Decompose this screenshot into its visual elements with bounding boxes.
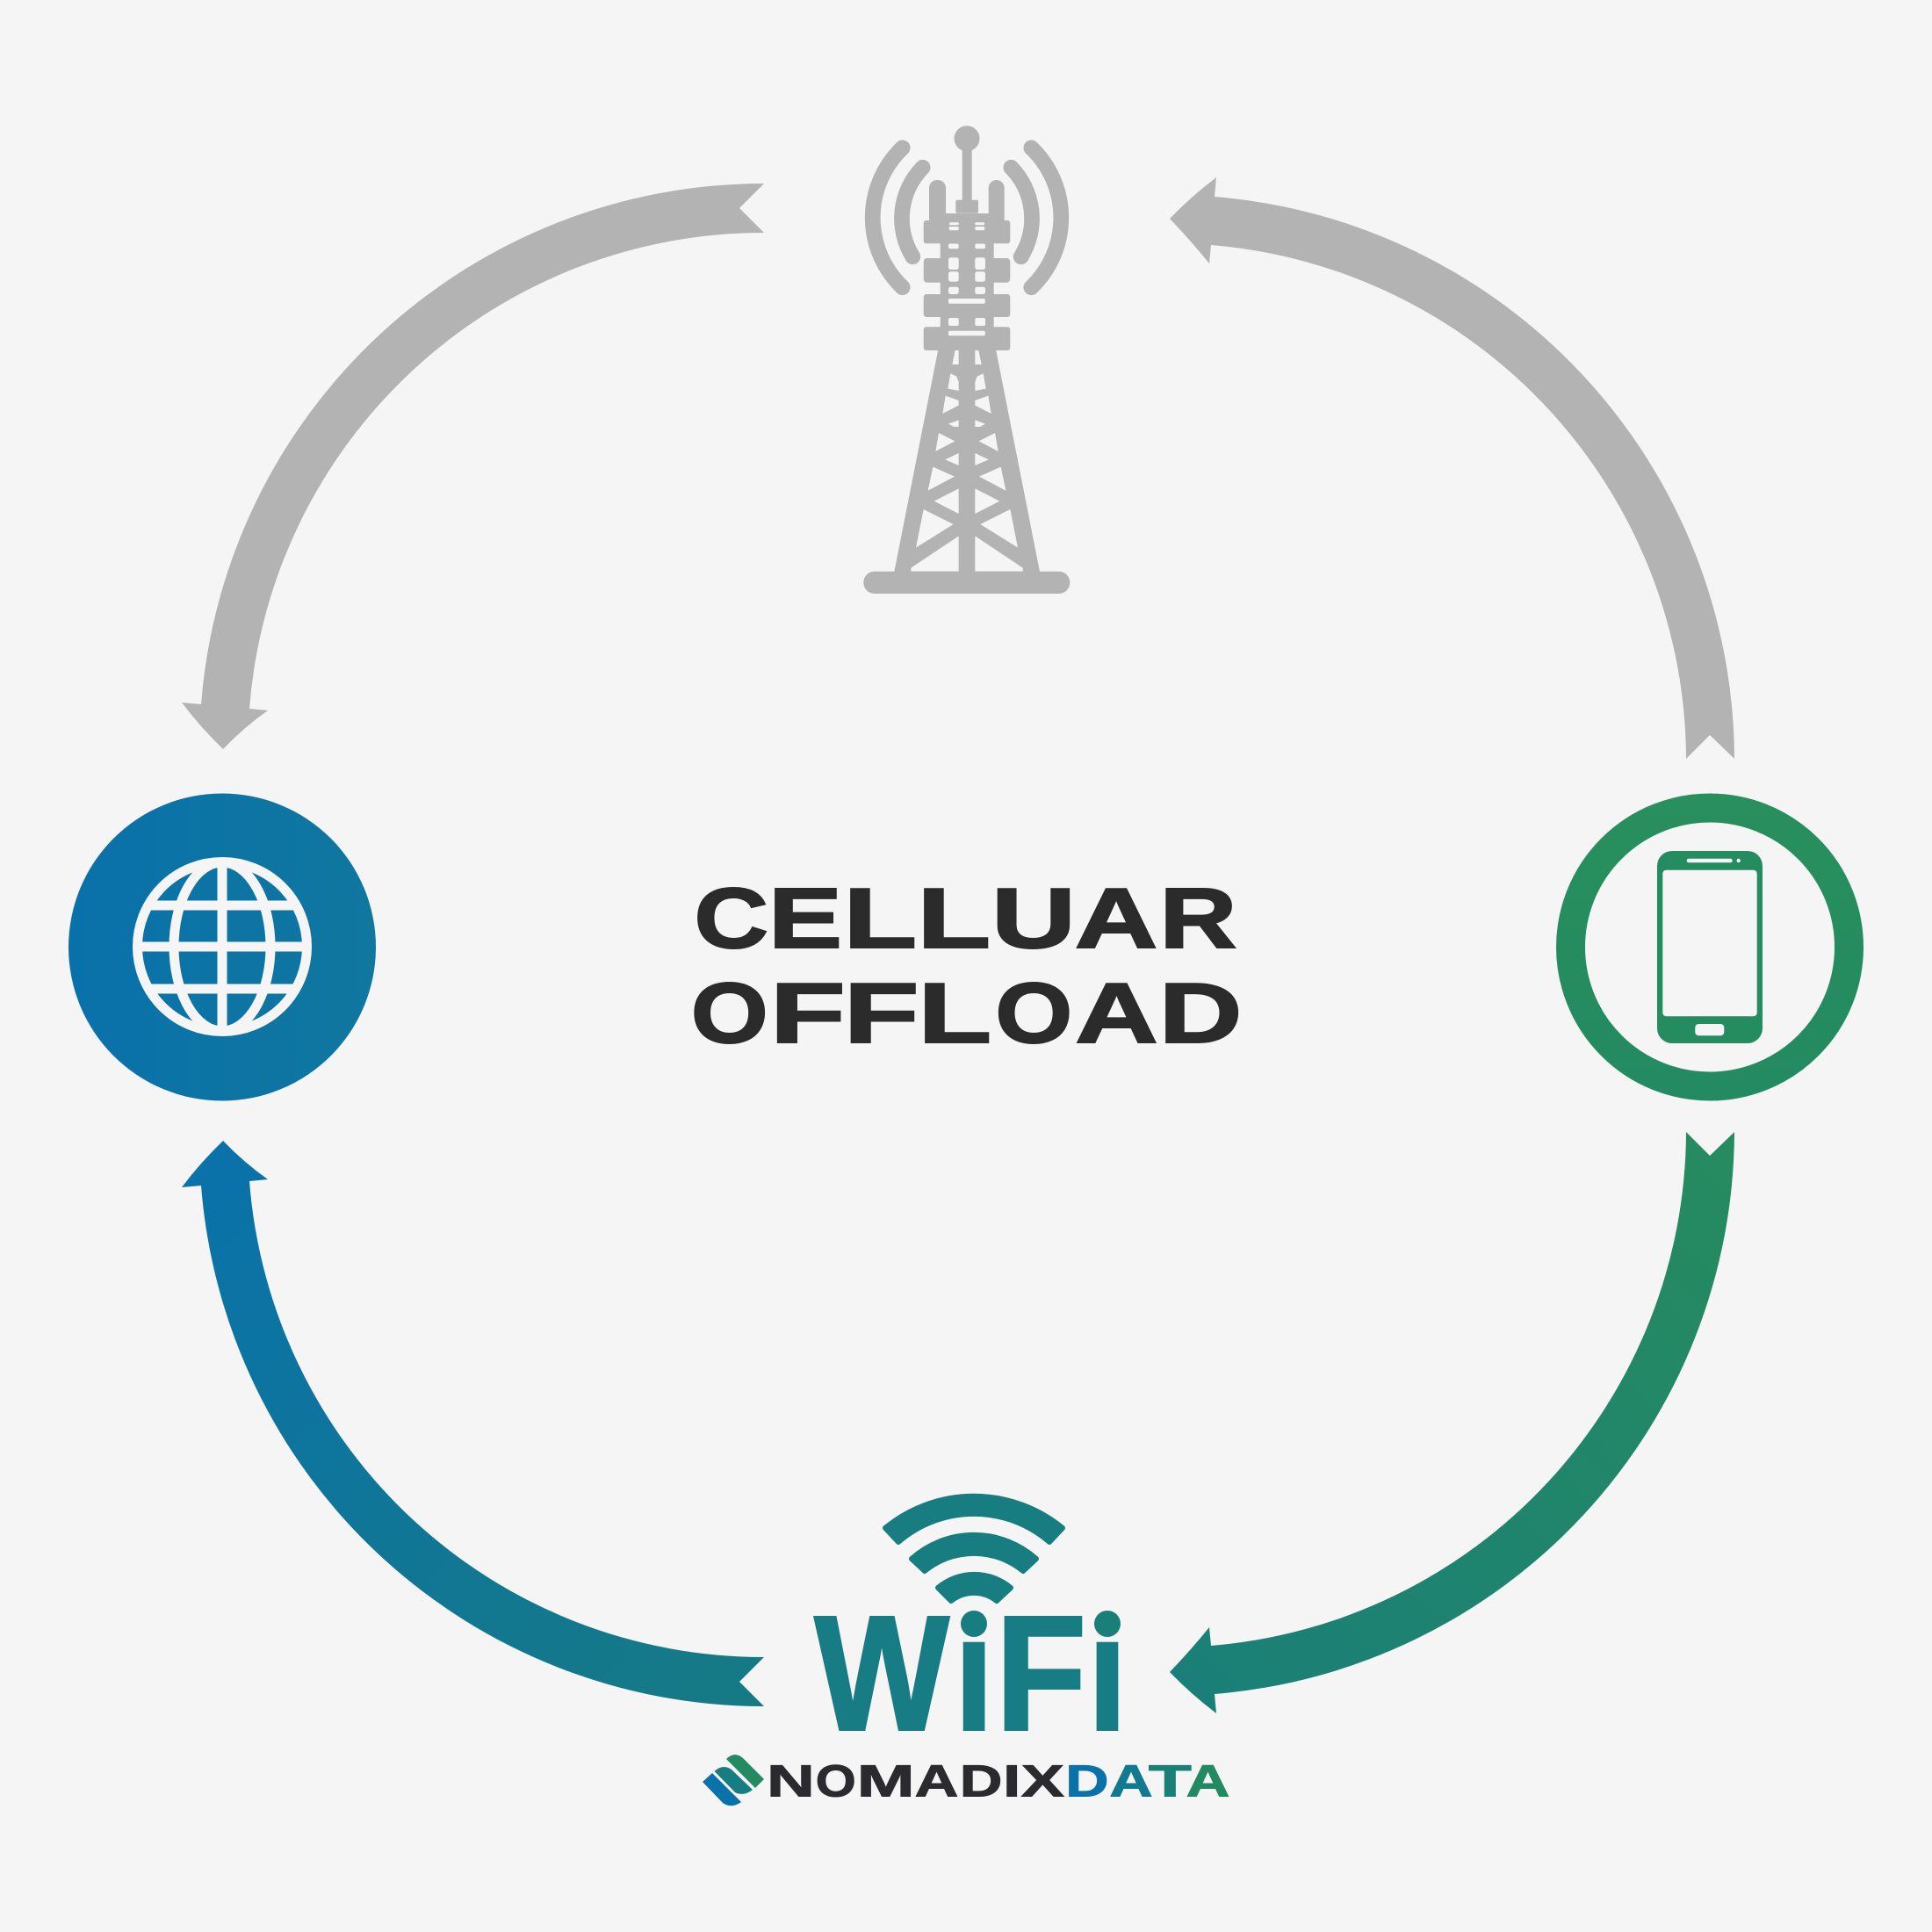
arrow: phone to tower (grey, top right) [1170,177,1734,759]
title line 1: C [694,870,768,966]
icon: cell tower [863,126,1070,594]
icon: smartphone in green ring [1570,808,1849,1086]
logo wordmark: X [1021,1756,1064,1806]
wifi signal arcs [885,1496,1063,1601]
title line 2: F [844,965,919,1061]
title line 2: F [770,965,846,1061]
title line 2: L [918,965,991,1061]
tower lattice cut-outs right [975,350,1023,572]
title line 2: O [995,965,1072,1061]
icon: internet globe in blue circle [68,794,376,1101]
tower antenna mast [929,126,1005,233]
logo wordmark: I [1003,1756,1020,1806]
logo wordmark: O [816,1756,856,1806]
logo wordmark: A [915,1756,958,1806]
tower base plate [863,572,1070,594]
title line 1: A [1075,870,1157,966]
arrow: wifi to internet (blue, bottom left) [182,1141,764,1706]
wifi wordmark: i [955,1582,994,1765]
tower lattice cut-outs left [911,350,959,572]
title line 2: O [691,965,768,1061]
arrow: phone to wifi (green, bottom right) [1170,1132,1734,1713]
wifi wordmark: W [815,1582,949,1765]
title line 1: L [843,870,917,966]
logo mark [703,1755,764,1806]
tower signal waves [873,148,1061,287]
wifi wordmark: F [996,1582,1086,1765]
title line 1: E [768,870,842,966]
wifi i-dots [957,1603,1124,1641]
logo wordmark: D [1065,1756,1109,1806]
arrow: tower to internet (grey, top left) [182,184,764,749]
logo wordmark: A [1109,1756,1153,1806]
title line 1: R [1159,870,1236,966]
title line 2: D [1159,965,1242,1061]
icon: wifi logo [815,1496,1127,1765]
logo wordmark: A [1186,1756,1229,1806]
logo wordmark: M [857,1756,915,1806]
logo wordmark: D [960,1756,1002,1806]
title line 2: A [1075,965,1158,1061]
logo: Nomadix Data [703,1755,1229,1806]
tower upper body with blocks [924,213,1010,352]
tower lattice legs [894,350,1040,572]
logo wordmark: T [1149,1756,1192,1806]
wifi wordmark: i [1088,1582,1127,1765]
title line 1: L [917,870,991,966]
tower upper body cut-outs [948,222,985,335]
logo wordmark: N [767,1756,815,1806]
title line 1: U [991,870,1076,966]
title: Celluar Offload [691,870,1242,1061]
